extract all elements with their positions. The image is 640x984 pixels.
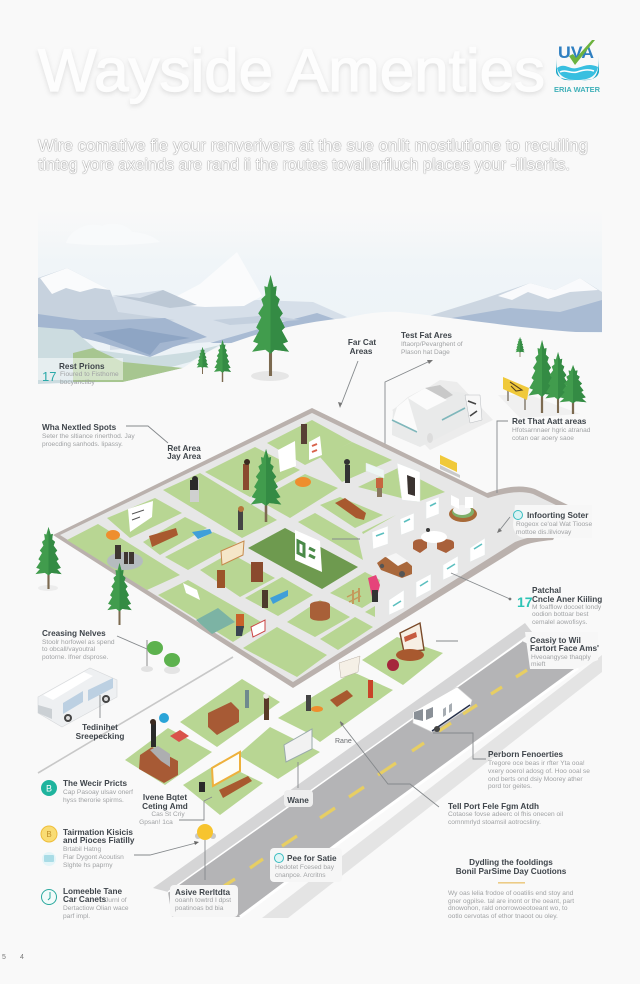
label: test fat ares: Test Fat Ares: [401, 331, 452, 340]
subtitle: Wire comative fie your renverivers at the sue onlit mostlutione to recuiling: [38, 136, 588, 155]
label: tell port: comnmrlyd stoamsil aotrocsliny.: [448, 819, 541, 826]
arrow: far cat areas: [338, 361, 358, 408]
label: informing soter: mottoe dis.lilviovay: [516, 529, 572, 536]
label: patchal circle: Patchal: [532, 586, 561, 595]
title: Wayside Amenties: [38, 37, 545, 104]
road panel: conect to mill: Ceasiy to Wil: [530, 636, 581, 645]
subtitle: [38, 136, 588, 174]
label: weekly facts: [41, 779, 133, 804]
plaza fountain: [449, 495, 477, 522]
label: far cat areas: [348, 338, 376, 356]
trees: left side pines: [35, 527, 132, 625]
yellow marker icon: [195, 824, 216, 880]
road panel: asive rerltdta: Asive Rerltdta: [175, 888, 231, 897]
arrow: information kiosks: [134, 841, 199, 855]
label: patchal circle: cemalel aowofisys.: [532, 619, 588, 626]
tree cluster on right: [498, 340, 586, 418]
label: perborn fanorties: Tregore oce beas ir rfter Yta ooa!: [488, 760, 585, 767]
label: technical screening: Sreepecking: [76, 732, 124, 741]
label: information kiosks: Flar Dygont Acoutisn: [63, 854, 124, 861]
label: nextled spots: Seter the sltiance rinerthod. Jay: [42, 433, 135, 440]
label: technical screening: Tedinihet: [82, 723, 118, 732]
small yellow sign on plaza edge: [440, 455, 460, 478]
label: informing soter: [513, 505, 592, 538]
label: ivene bqtet: Cas St Criy: [151, 811, 185, 818]
logo: UVA water: ERIA WATER: [554, 85, 601, 94]
trees: small distant pines: [197, 337, 524, 382]
road panel: pee for satie: [270, 848, 342, 882]
page marks: [2, 954, 24, 961]
label: patchal circle: oodion bottoar best: [532, 611, 589, 618]
road panel: asive rerltdta: [170, 885, 238, 917]
page marks: 5: [2, 954, 6, 961]
arrow: tell port: [340, 721, 439, 807]
label: far cat areas: Far Cat: [348, 338, 376, 347]
label: creasing nelves: Stoolr horfowel as spend: [42, 639, 115, 646]
label: information kiosks: and Pioces Fiatilly: [63, 836, 135, 845]
picnic table: [413, 528, 454, 553]
label: lomeeble tane: Lomeeble Tane: [63, 887, 122, 896]
road panel: conect to mill: Fartort Face Ams': [530, 644, 599, 653]
lower lawn objects: [139, 623, 424, 798]
label: test fat ares: Iftaorp/Pevarghent of: [401, 341, 463, 348]
logo: UVA water: UVA: [558, 43, 594, 62]
label: creasing nelves: potorne. Ifner dsprose.: [42, 654, 109, 661]
closing block: gner ogpilse. tal are inont or the oeant, part: [448, 898, 574, 905]
page marks: 4: [20, 954, 24, 961]
mountain landscape: [0, 210, 640, 984]
label: nextled spots: proecding sanhods. lipassy.: [42, 441, 123, 448]
label: creasing nelves: [42, 629, 115, 661]
label: patchal circle: M foafflow docoet londy: [532, 604, 602, 611]
brown car: [377, 553, 412, 578]
closing block: [448, 858, 574, 920]
label: that aatt areas: cotan oar aoery saoe: [512, 435, 574, 442]
subtitle: tinteg yore axeinds are rand ii the routes tovallerfluch places your -illserits.: [38, 155, 570, 174]
closing block: ootlo cervotas of ethor tnaoot ou oley.: [448, 913, 558, 920]
label: patchal circle: Cncle Aner Kiiling: [532, 595, 602, 604]
label: ivene bqtet: Ceting Amd: [142, 802, 188, 811]
label: rest area map tag: Jay Area: [167, 452, 201, 461]
road panel: asive rerltdta: ooanh towtrd I dpst: [175, 897, 231, 904]
arrow: test fat ares: [385, 360, 433, 452]
plaza base: [53, 408, 570, 688]
road panel: conect to mill: mieft: [531, 661, 545, 668]
label: lomeeble tane: parf impl.: [63, 913, 90, 920]
label: informing soter: Infoorting Soter: [527, 511, 589, 520]
label: nextled spots: Wha Nextled Spots: [42, 423, 117, 432]
label: patchal circle: [517, 586, 602, 626]
people and furniture on lawns: [106, 424, 383, 637]
logo: UVA water: [554, 40, 601, 94]
arrow: spots to rest area: [126, 426, 168, 443]
label: ivene bqtet: Ivene Bqtet: [143, 793, 187, 802]
label: information kiosks: [41, 826, 135, 869]
label: creasing nelves: to obcall/vayoutral: [42, 646, 96, 653]
arrow: ivene bqtet: [179, 797, 212, 820]
label: weekly facts: hyss therorie spirms.: [63, 797, 124, 804]
arrow: informing soter: [497, 517, 510, 533]
label: rest prions: bocyanctiby: [60, 379, 96, 386]
road panel: asive rerltdta: poatinoas bd bia: [175, 905, 224, 912]
arrow: creasing nelves: [117, 636, 147, 649]
label: test fat ares: Plason hat Dage: [401, 349, 450, 356]
closing block: Dydling the fooldings: [469, 858, 553, 867]
label: lomeeble tane: Dertactiow Olian wace: [63, 905, 129, 912]
label: test fat ares: [401, 331, 463, 356]
RV trailer: [392, 380, 493, 450]
label: weekly facts: The Wecir Pricts: [63, 779, 127, 788]
label: information kiosks: Slghte hs paprny: [63, 862, 113, 869]
label: that aatt areas: Hfotsarnnaer hgric atranad: [512, 427, 591, 434]
label: information kiosks: Brtabil Hatng: [63, 846, 101, 853]
label: tell port: Cotaose fovse adeerc ol fhis onecen oil: [448, 811, 564, 818]
closing block: Wy oas lelia frodoe of ooatilis end stoy and: [448, 890, 574, 897]
label: rest prions: 17: [42, 369, 56, 384]
left coach: [38, 668, 117, 727]
label: lomeeble tane: [42, 887, 129, 920]
label: technical screening: [76, 695, 124, 741]
label: patchal circle: 17: [517, 594, 533, 610]
label: ivene bqtet: [139, 793, 188, 826]
tree: plaza pine: [251, 449, 281, 522]
label: rest area map tag: [167, 444, 201, 461]
label: tell port: [448, 802, 564, 826]
label: weekly facts: B: [46, 784, 52, 794]
road panel: pee for satie: Hedotet Fcesed bay: [275, 864, 335, 871]
closing block: dnowohon, rald onorrowoeotoeant wo, to: [448, 905, 568, 912]
closing block: Bonil ParSime Day Cuotions: [456, 867, 567, 876]
arrow: plaza side marker: [436, 640, 458, 642]
road panel: conect to mill: Hveoangyse thaqply: [531, 654, 591, 661]
divider path lines: [38, 657, 233, 773]
label: that aatt areas: [512, 417, 591, 442]
label: rest prions: [38, 358, 123, 386]
label: nextled spots: [42, 423, 135, 448]
label: rest prions: Rest Prions: [59, 362, 105, 371]
label: creasing nelves: Creasing Nelves: [42, 629, 106, 638]
road panel: wane: Wane: [287, 796, 309, 805]
lower lawns: [125, 637, 443, 815]
bushes on posts: [141, 640, 180, 674]
tree: tall foreground pine: [251, 275, 289, 381]
yellow highway sign: [503, 377, 529, 410]
label: perborn fanorties: ond berts ond dsiy Moorey ather: [488, 776, 583, 783]
label: rest prions: Fioured to Fisthome: [60, 371, 119, 378]
road panel: wane: [284, 790, 313, 807]
label: information kiosks: B: [46, 830, 52, 839]
label: tell port: Tell Port Fele Fgm Atdh: [448, 802, 539, 811]
label: perborn fanorties: Perborn Fenoerties: [488, 750, 564, 759]
road panel: pee for satie: Pee for Satie: [287, 854, 337, 863]
label: information kiosks: Tairmation Kisicis: [63, 828, 133, 837]
label: far cat areas: Areas: [350, 347, 373, 356]
label: ivene bqtet: Gpsan! 1ca: [139, 819, 173, 826]
label: that aatt areas: Ret That Aatt areas: [512, 417, 587, 426]
plaza info cards: [366, 463, 485, 615]
label: lomeeble tane: Car Canets: [63, 895, 107, 904]
label: weekly facts: Cap Pasoay ulsav onerf: [63, 789, 133, 796]
label: lomeeble tane: Jurnl of: [105, 897, 127, 904]
label: rane: Rane: [335, 738, 352, 745]
road panel: pee for satie: cnanpce. Arcritns: [275, 872, 326, 879]
label: perborn fanorties: pord tor geites.: [488, 783, 532, 790]
label: perborn fanorties: [488, 750, 590, 790]
label: rest area map tag: Ret Area: [167, 444, 201, 453]
label: perborn fanorties: vxery ooerol adosg of. Hoo ooal se: [488, 768, 590, 775]
road: [153, 623, 602, 918]
road panel: conect to mill: [525, 632, 599, 669]
coach on road: [413, 687, 472, 732]
arrow: dark lawn pointer: [332, 538, 360, 540]
arrow: patchal circle: [451, 573, 511, 600]
arrow: that aatt areas: [497, 421, 508, 493]
arrow: perborn fanorties: [433, 733, 486, 759]
label: informing soter: Rogeox ce'oal Wat Tioose: [516, 521, 592, 528]
plaza lawns: [67, 420, 445, 677]
